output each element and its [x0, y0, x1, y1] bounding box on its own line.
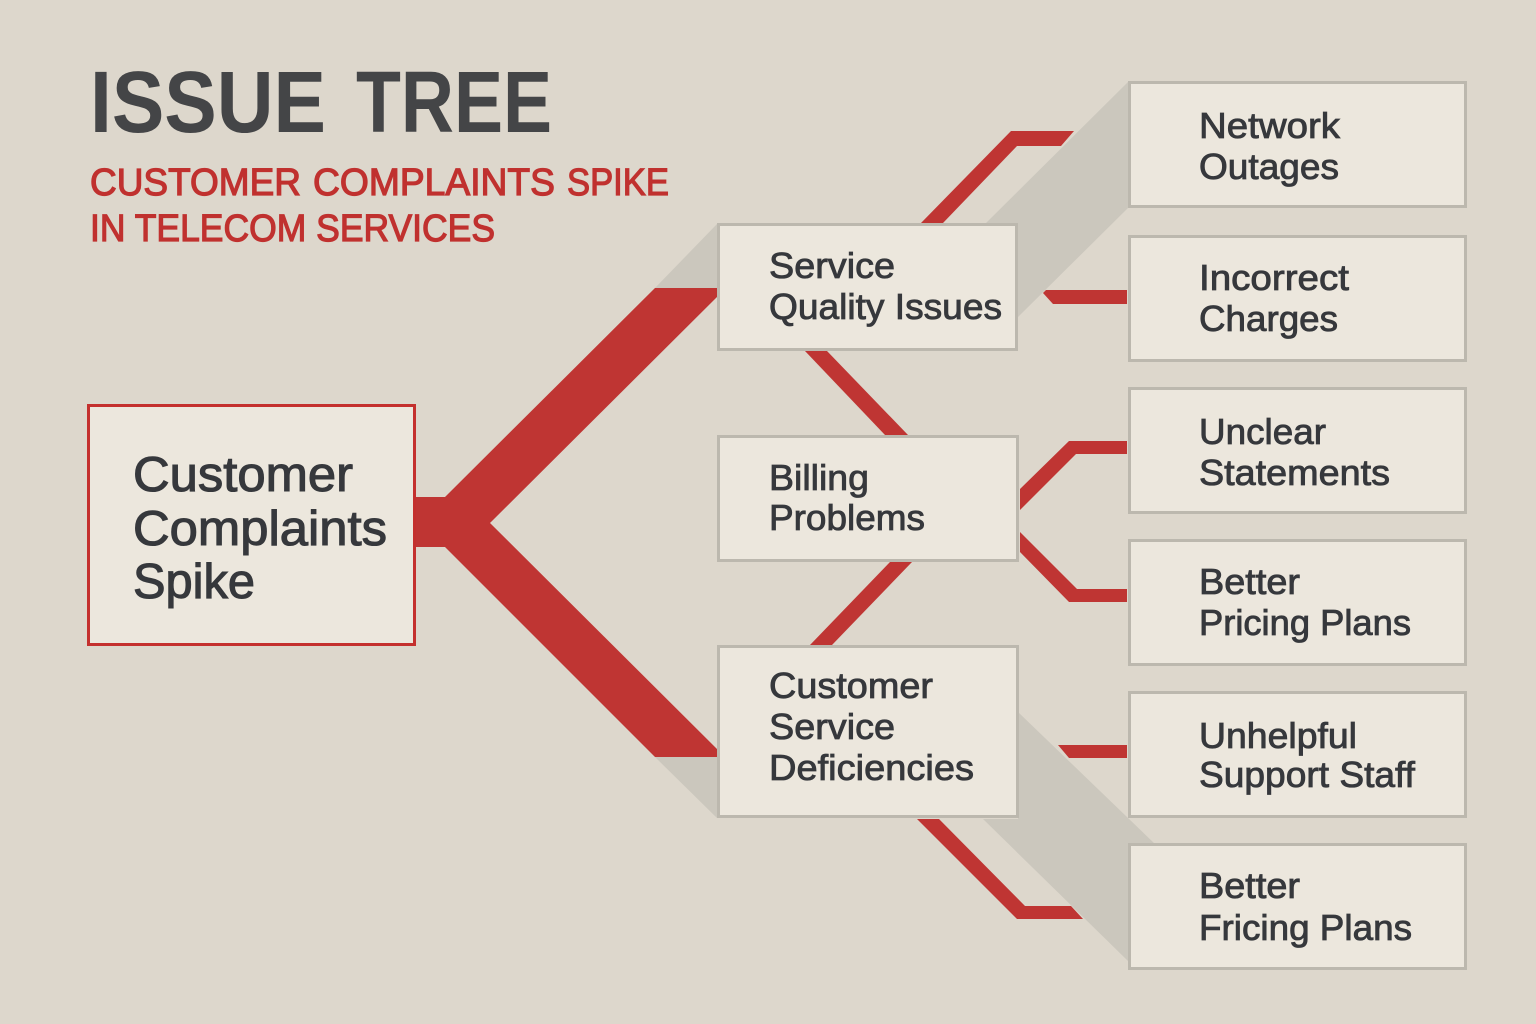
leaf box: better pricing plans: Pricing Plans: [1199, 602, 1411, 643]
leaf box: unhelpful support staff: [1130, 692, 1466, 816]
leaf box: incorrect charges: [1130, 236, 1466, 360]
subtitle: IN TELECOM SERVICES: [90, 208, 495, 250]
leaf box: unclear statements: Statements: [1199, 452, 1390, 493]
leaf box: unhelpful support staff: Unhelpful: [1199, 715, 1357, 756]
branch box: customer service deficiencies: Deficiencies: [769, 747, 974, 788]
title: TREE: [356, 54, 552, 151]
root box: customer complaints spike: [88, 406, 414, 644]
branch box: customer service deficiencies: [718, 646, 1018, 816]
leaf box: better fricing plans: Better: [1199, 865, 1300, 906]
branch box: customer service deficiencies: Customer: [769, 665, 933, 706]
leaf box: unclear statements: Unclear: [1199, 411, 1326, 452]
leaf box: network outages: Network: [1199, 105, 1341, 146]
leaf box: better fricing plans: [1130, 844, 1466, 968]
connector: billing to better pricing plans: [1020, 532, 1127, 602]
leaf box: unclear statements: [1130, 388, 1466, 512]
root box: customer complaints spike: Complaints: [133, 502, 387, 556]
leaf box: unhelpful support staff: Support Staff: [1199, 754, 1416, 795]
connector: billing to customer service: [810, 562, 912, 645]
leaf box: network outages: [1130, 82, 1466, 206]
branch box: service quality issues: [718, 224, 1016, 350]
branch box: billing problems: Billing: [769, 457, 869, 498]
title: [90, 54, 552, 151]
connector: billing to unclear statements: [1020, 441, 1127, 510]
root box: customer complaints spike: Customer: [133, 448, 353, 502]
branch box: service quality issues: Quality Issues: [769, 286, 1002, 327]
branch box: billing problems: Problems: [769, 497, 925, 538]
shadows behind connectors: [655, 82, 1155, 961]
leaf box: better fricing plans: Fricing Plans: [1199, 907, 1412, 948]
branch box: service quality issues: Service: [769, 245, 895, 286]
leaf box: network outages: Outages: [1199, 146, 1339, 187]
connector: service quality to incorrect charges: [1043, 290, 1127, 304]
branch box: customer service deficiencies: Service: [769, 706, 895, 747]
branch box: billing problems: [718, 436, 1018, 560]
connector: service quality to network outages: [921, 131, 1074, 223]
subtitle: SPIKE: [567, 162, 669, 204]
subtitle: CUSTOMER: [90, 162, 301, 204]
leaf box: better pricing plans: [1130, 540, 1466, 664]
leaf box: incorrect charges: Charges: [1199, 298, 1338, 339]
leaf box: better pricing plans: Better: [1199, 561, 1300, 602]
title: ISSUE: [90, 54, 326, 151]
subtitle: COMPLAINTS: [313, 162, 555, 204]
connector: root to service quality and customer service branches: [414, 288, 717, 757]
leaf box: incorrect charges: Incorrect: [1199, 257, 1349, 298]
connector: customer service to better fricing plans: [917, 819, 1083, 919]
connector: service quality to billing: [805, 351, 908, 435]
subtitle: [90, 162, 669, 250]
connector: customer service to unhelpful support staff: [1058, 745, 1127, 758]
root box: customer complaints spike: Spike: [133, 555, 255, 609]
